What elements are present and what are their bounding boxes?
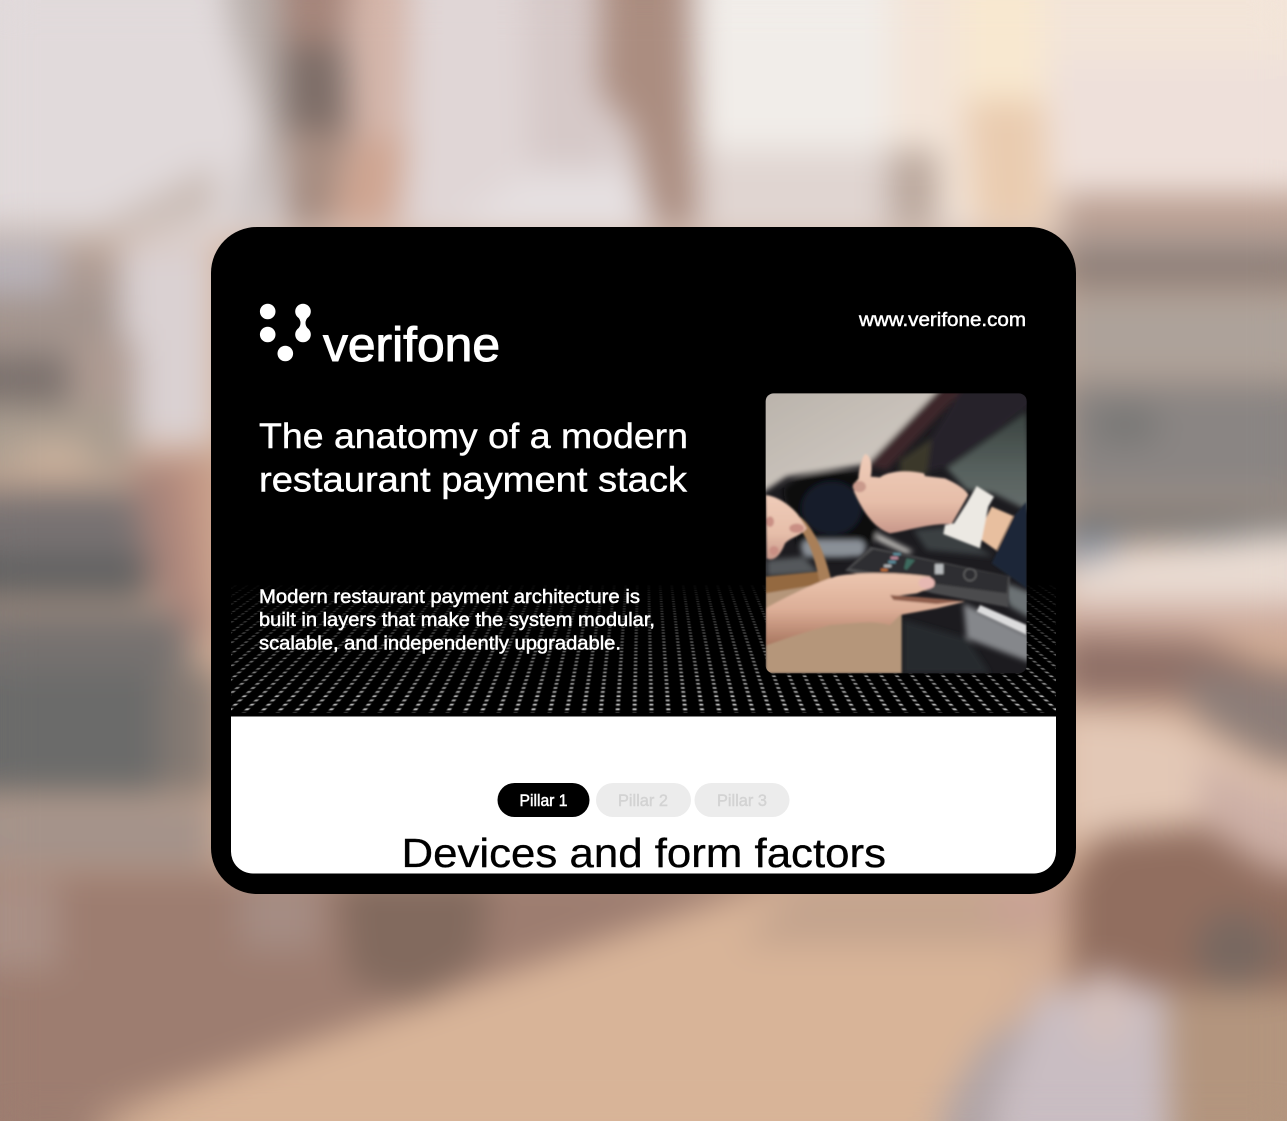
- panel: white content area: [231, 716, 1056, 874]
- intro paragraph: [259, 586, 655, 654]
- website url: www.verifone.com: [858, 309, 1026, 331]
- title: The anatomy of a modern: [259, 417, 688, 456]
- bottom: [0, 870, 800, 1121]
- top band: [0, 0, 1287, 240]
- tab: Pillar 2: [596, 783, 691, 817]
- tab: Pillar 3: Pillar 3: [717, 792, 767, 810]
- icon: verifone dots mark: [260, 304, 311, 361]
- photo: contactless payment at a car window: [757, 387, 1033, 673]
- section heading: Devices and form factors: [402, 830, 886, 876]
- intro paragraph: scalable, and independently upgradable.: [259, 632, 621, 654]
- right column: [1060, 195, 1287, 235]
- card foreground content: [259, 304, 1027, 868]
- tab: Pillar 2: Pillar 2: [618, 792, 668, 810]
- wordmark: verifone: [323, 319, 500, 372]
- logo: verifone: [260, 304, 500, 372]
- title: restaurant payment stack: [259, 460, 688, 500]
- tab: Pillar 1: Pillar 1: [520, 792, 568, 810]
- tab: Pillar 1: [498, 783, 590, 817]
- title: [259, 417, 688, 500]
- tab: Pillar 3: [694, 783, 790, 817]
- left column: [0, 165, 215, 250]
- panel: black device card: [211, 227, 1076, 894]
- intro paragraph: built in layers that make the system modular,: [259, 609, 655, 631]
- intro paragraph: Modern restaurant payment architecture is: [259, 586, 640, 608]
- halftone dot floor pattern: [231, 586, 1056, 713]
- pillar tabs: [498, 783, 790, 817]
